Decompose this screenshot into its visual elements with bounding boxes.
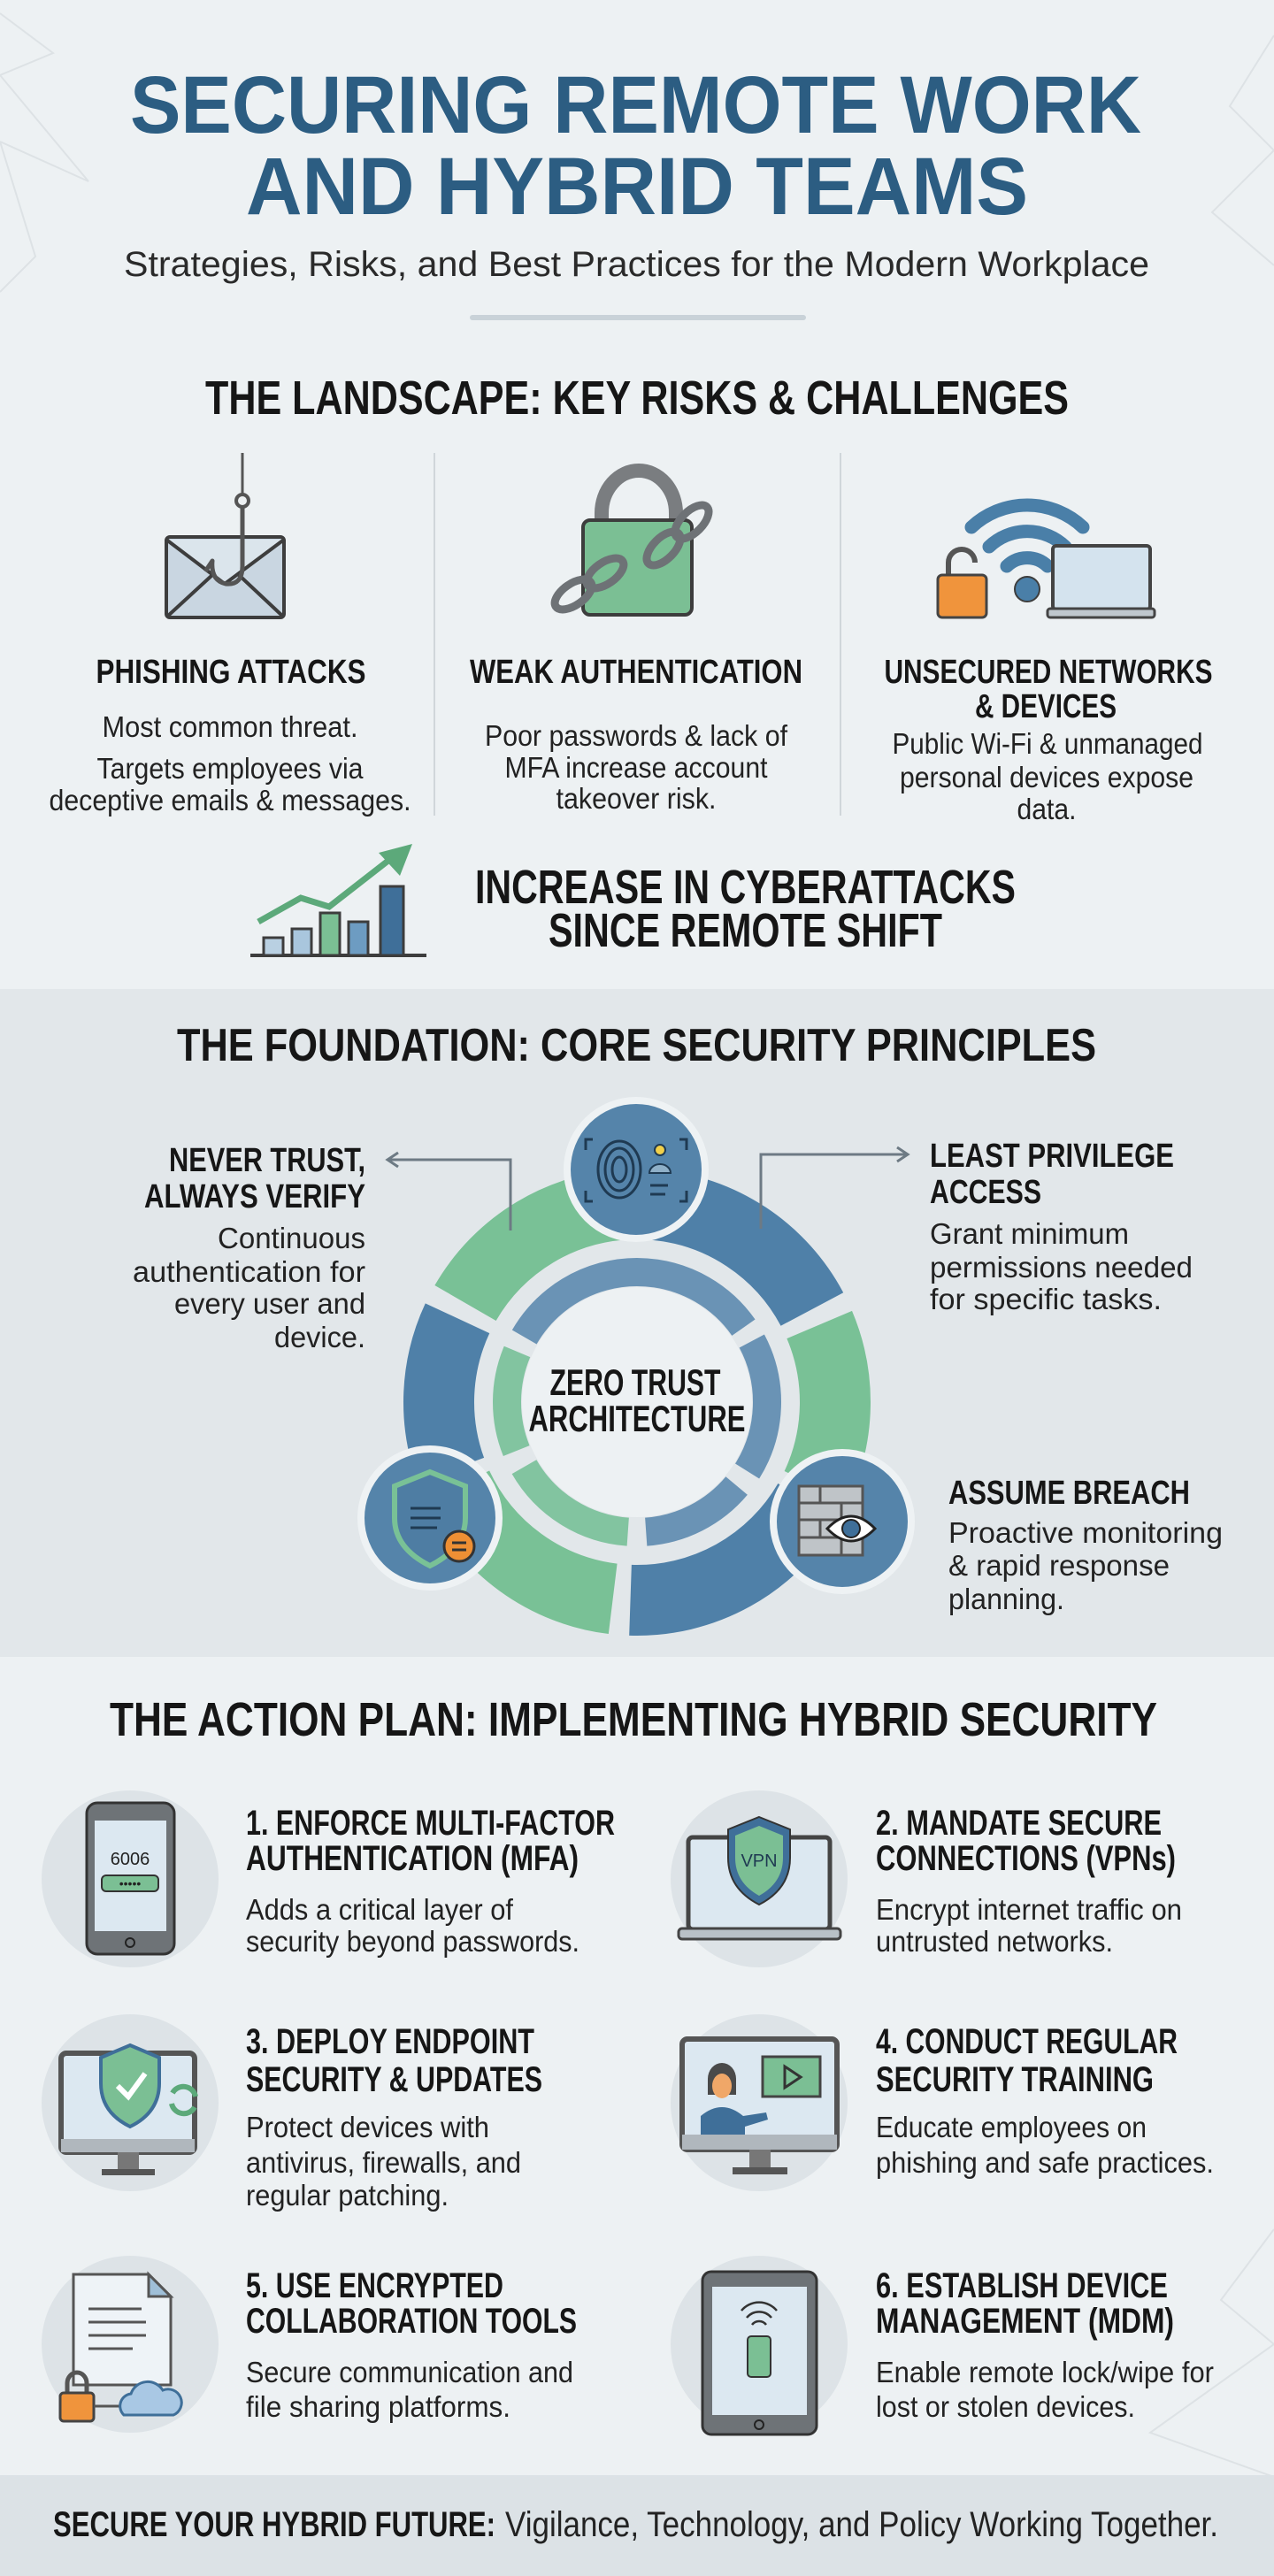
text block: never trust: ALWAYS VERIFY bbox=[144, 1178, 365, 1215]
icon: laptop with VPN shield bbox=[671, 1790, 848, 1967]
text block: assume breach: planning. bbox=[948, 1583, 1064, 1615]
icon: bar chart with arrow bbox=[250, 844, 426, 955]
item 3: endpoint security: Protect devices with bbox=[246, 2111, 489, 2143]
footer: SECURE YOUR HYBRID FUTURE: bbox=[53, 2505, 495, 2544]
text block: least privilege: LEAST PRIVILEGE bbox=[930, 1138, 1174, 1175]
icon: phone with code bbox=[42, 1790, 219, 1967]
icon: phone with code: ••••• bbox=[119, 1876, 141, 1890]
text block: assume breach bbox=[948, 1475, 1223, 1615]
text block: least privilege: Grant minimum bbox=[930, 1217, 1129, 1250]
item 4: training bbox=[671, 2014, 1214, 2191]
item 4: training: SECURITY TRAINING bbox=[876, 2060, 1154, 2099]
title bbox=[130, 60, 1141, 232]
icon: wifi, lock and laptop bbox=[938, 505, 1155, 617]
item 3: endpoint security bbox=[42, 2014, 542, 2212]
item 6: MDM: Enable remote lock/wipe for bbox=[876, 2356, 1214, 2388]
panel: unsecured networks: data. bbox=[1017, 793, 1076, 825]
text block: assume breach: Proactive monitoring bbox=[948, 1516, 1223, 1549]
item 5: encrypted collaboration bbox=[42, 2256, 577, 2433]
panel: phishing bbox=[50, 453, 411, 816]
chart: zero trust cycle bbox=[366, 1131, 908, 1673]
panel: weak authentication: MFA increase account bbox=[504, 751, 768, 784]
heading: landscape: THE LANDSCAPE: KEY RISKS & CHALLENGES bbox=[205, 372, 1069, 425]
item 3: endpoint security: regular patching. bbox=[246, 2179, 449, 2212]
item 2: VPN bbox=[671, 1790, 1182, 1967]
item 5: encrypted collaboration: 5. USE ENCRYPTED bbox=[246, 2266, 503, 2305]
text block: never trust: authentication for bbox=[133, 1255, 365, 1288]
icon: monitor with trainer bbox=[671, 2014, 848, 2191]
item 2: VPN: Encrypt internet traffic on bbox=[876, 1893, 1182, 1926]
panel: weak authentication bbox=[470, 471, 802, 815]
panel: phishing: PHISHING ATTACKS bbox=[96, 654, 366, 691]
panel: weak authentication: WEAK AUTHENTICATION bbox=[470, 654, 802, 691]
panel: phishing: deceptive emails & messages. bbox=[50, 784, 411, 816]
text block: never trust: device. bbox=[274, 1321, 365, 1353]
panel: unsecured networks bbox=[885, 505, 1212, 825]
text block: never trust: NEVER TRUST, bbox=[169, 1142, 365, 1179]
callout: increase in cyberattacks: INCREASE IN CYBERATTACKS bbox=[475, 861, 1016, 914]
item 3: endpoint security: 3. DEPLOY ENDPOINT bbox=[246, 2022, 534, 2061]
text block: least privilege: permissions needed bbox=[930, 1251, 1193, 1284]
text block: never trust: Continuous bbox=[218, 1222, 365, 1254]
arrow: to least privilege bbox=[761, 1147, 908, 1229]
panel: foundation band bbox=[0, 989, 1274, 1673]
item 3: endpoint security: antivirus, firewalls, and bbox=[246, 2146, 521, 2179]
text block: never trust: every user and bbox=[174, 1287, 365, 1320]
icon: laptop with VPN shield: VPN bbox=[741, 1852, 778, 1871]
text block: assume breach: & rapid response bbox=[948, 1549, 1170, 1582]
item 6: MDM: lost or stolen devices. bbox=[876, 2390, 1135, 2423]
item 1: MFA: Adds a critical layer of bbox=[246, 1893, 514, 1926]
panel: unsecured networks: Public Wi-Fi & unmanaged bbox=[892, 727, 1203, 760]
item 5: encrypted collaboration: COLLABORATION TOOLS bbox=[246, 2302, 577, 2341]
icon: document, lock and cloud bbox=[42, 2256, 219, 2433]
icon: envelope with hook bbox=[166, 453, 284, 617]
item 1: MFA: security beyond passwords. bbox=[246, 1925, 579, 1958]
item 1: MFA: 1. ENFORCE MULTI-FACTOR bbox=[246, 1804, 615, 1843]
callout: increase in cyberattacks: SINCE REMOTE SHIFT bbox=[549, 904, 942, 957]
title: SECURING REMOTE WORK bbox=[130, 60, 1141, 150]
arrow: to never trust bbox=[388, 1153, 510, 1230]
item 5: encrypted collaboration: file sharing platforms. bbox=[246, 2390, 510, 2423]
icon: shield node bbox=[361, 1449, 499, 1587]
text: zero trust architecture: ZERO TRUST bbox=[550, 1361, 721, 1403]
item 4: training: Educate employees on bbox=[876, 2111, 1147, 2143]
text block: least privilege bbox=[930, 1138, 1193, 1315]
item 2: VPN: CONNECTIONS (VPNs) bbox=[876, 1839, 1176, 1878]
text block: least privilege: for specific tasks. bbox=[930, 1283, 1162, 1315]
item 2: VPN: untrusted networks. bbox=[876, 1925, 1113, 1958]
item 6: MDM bbox=[671, 2256, 1214, 2434]
text block: never trust bbox=[133, 1142, 365, 1353]
panel: phishing: Targets employees via bbox=[97, 752, 364, 785]
heading: foundation: THE FOUNDATION: CORE SECURITY PRINCIPLES bbox=[177, 1020, 1096, 1071]
icon: phone with code: 6006 bbox=[111, 1850, 150, 1869]
item 1: MFA bbox=[42, 1790, 615, 1967]
icon: fingerprint node bbox=[567, 1100, 705, 1238]
item 2: VPN: 2. MANDATE SECURE bbox=[876, 1804, 1162, 1843]
text block: least privilege: ACCESS bbox=[930, 1174, 1041, 1211]
footer bbox=[0, 2475, 1274, 2576]
callout: increase in cyberattacks bbox=[250, 844, 1016, 957]
item 3: endpoint security: SECURITY & UPDATES bbox=[246, 2060, 542, 2099]
panel: weak authentication: takeover risk. bbox=[556, 782, 717, 815]
item 6: MDM: 6. ESTABLISH DEVICE bbox=[876, 2266, 1168, 2305]
panel: unsecured networks: personal devices expose bbox=[900, 761, 1193, 794]
item 4: training: 4. CONDUCT REGULAR bbox=[876, 2022, 1178, 2061]
panel: weak authentication: Poor passwords & lack of bbox=[485, 719, 788, 752]
icon: wall with eye node bbox=[773, 1453, 911, 1591]
panel: unsecured networks: & DEVICES bbox=[975, 688, 1117, 725]
panel: phishing: Most common threat. bbox=[103, 710, 357, 743]
text: zero trust architecture bbox=[529, 1361, 745, 1439]
item 1: MFA: AUTHENTICATION (MFA) bbox=[246, 1839, 579, 1878]
icon: lock with broken chain bbox=[549, 471, 714, 616]
text: zero trust architecture: ARCHITECTURE bbox=[529, 1398, 745, 1439]
item 5: encrypted collaboration: Secure communication and bbox=[246, 2356, 573, 2388]
icon: monitor with shield bbox=[42, 2014, 219, 2191]
icon: tablet with phone bbox=[671, 2256, 848, 2434]
item 4: training: phishing and safe practices. bbox=[876, 2146, 1214, 2179]
text block: assume breach: ASSUME BREACH bbox=[948, 1475, 1190, 1512]
subtitle: Strategies, Risks, and Best Practices for the Modern Workplace bbox=[124, 245, 1149, 284]
title: AND HYBRID TEAMS bbox=[246, 142, 1028, 232]
item 6: MDM: MANAGEMENT (MDM) bbox=[876, 2302, 1174, 2341]
